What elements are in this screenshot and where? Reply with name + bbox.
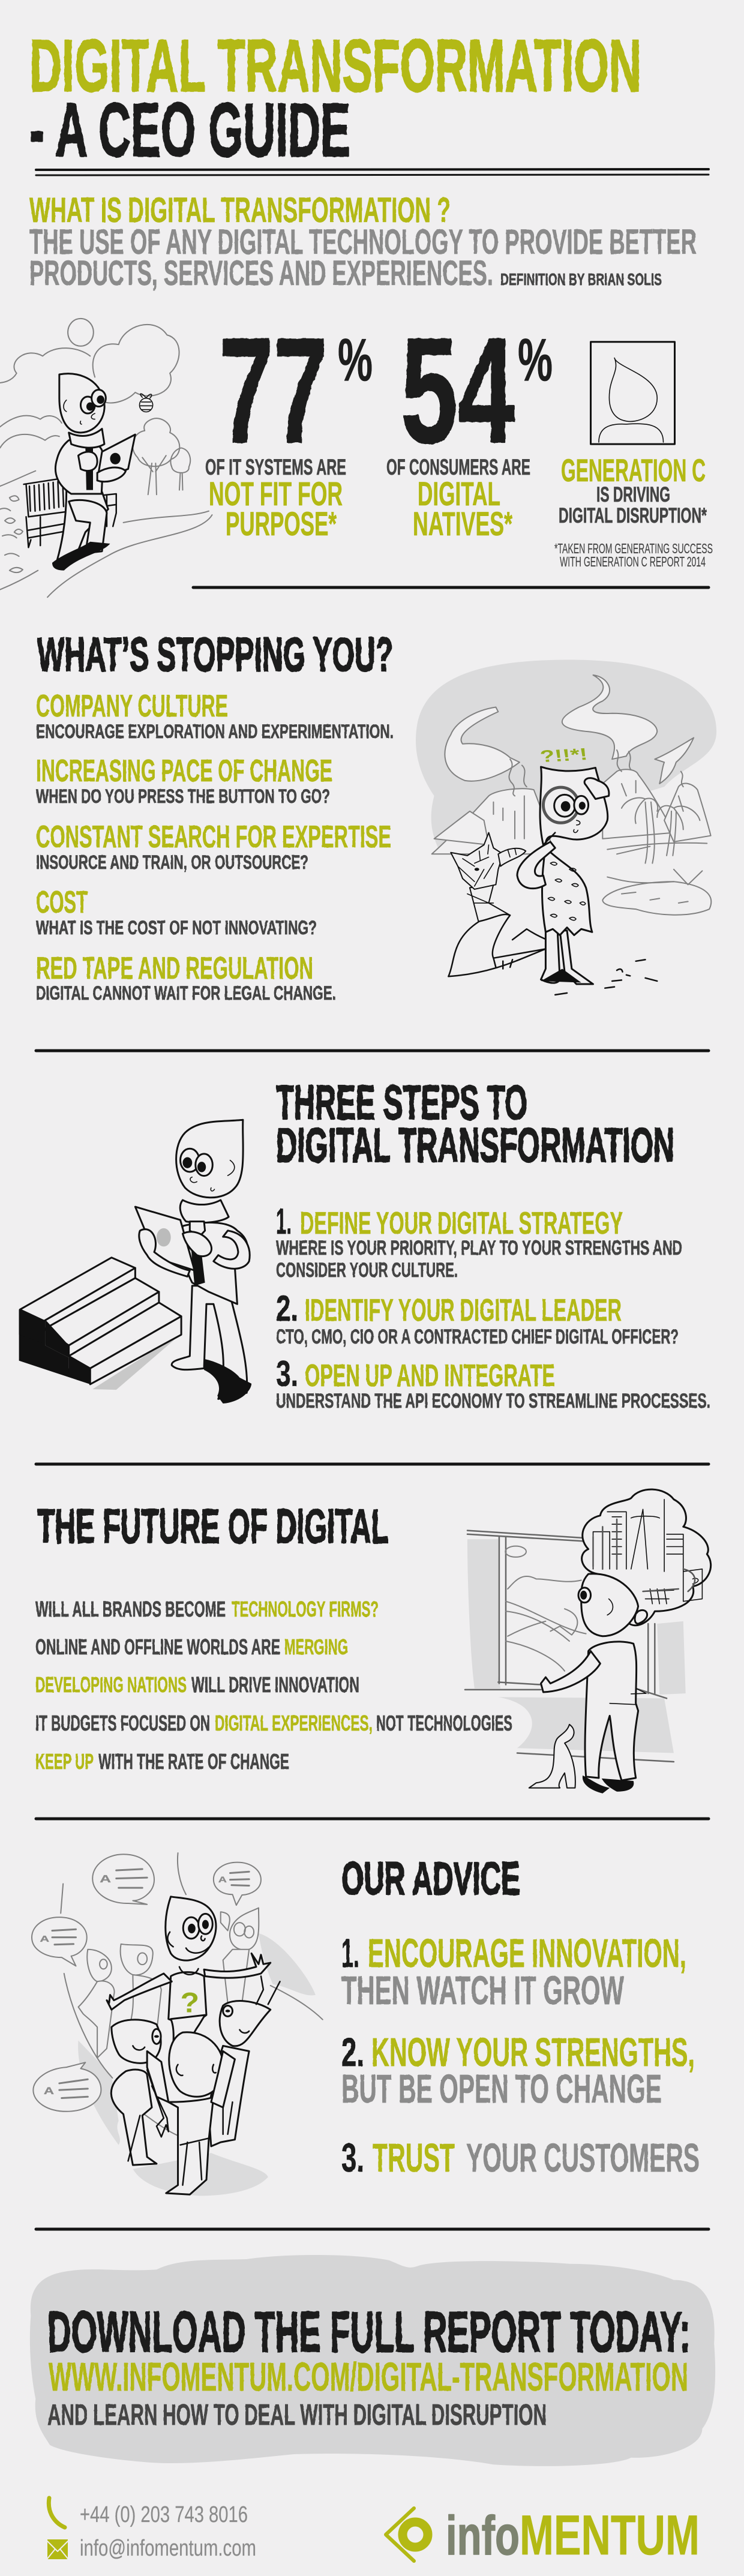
phone number: +44 (0) 203 743 8016 — [80, 2502, 248, 2527]
icon: portrait frame — [591, 342, 675, 444]
illustration: team lifting character with speech bubbles — [32, 1853, 323, 2196]
list: barriers: RED TAPE AND REGULATION — [36, 951, 313, 986]
stat: generation C with portrait icon — [559, 342, 707, 527]
stat: generation C with portrait icon: IS DRIVING — [596, 483, 670, 506]
email address: info@infomentum.com — [80, 2536, 256, 2561]
heading: our advice: OUR ADVICE — [341, 1853, 520, 1905]
list: barriers: WHEN DO YOU PRESS THE BUTTON TO GO? — [36, 785, 330, 807]
stat: 54%: % — [518, 326, 553, 394]
trend 5: KEEP UP — [35, 1749, 94, 1774]
supporting figures — [111, 1976, 280, 2194]
stat: 54%: NATIVES* — [413, 505, 512, 542]
list: barriers: WHAT IS THE COST OF NOT INNOVATING? — [36, 917, 317, 938]
list: barriers: ENCOURAGE EXPLORATION AND EXPERIMENTATION. — [36, 721, 394, 742]
illustration: character at window dreaming of future city — [465, 1489, 711, 1794]
stat: 54%: 54 — [401, 307, 515, 474]
advice 2 — [341, 2030, 695, 2112]
illustration: caveman with magnifying glass and volcanoes: ?!!*! — [539, 745, 589, 766]
list: barriers: COMPANY CULTURE — [36, 689, 228, 724]
advice 2: 2. — [341, 2030, 364, 2075]
trend 5: WITH THE RATE OF CHANGE — [98, 1749, 289, 1774]
illustration: character on stairs with tablet — [19, 1120, 251, 1404]
panel: download call to action — [30, 2255, 715, 2466]
advice 3 — [341, 2136, 700, 2181]
list: barriers: INCREASING PACE OF CHANGE — [36, 754, 332, 788]
step 1: 1. — [276, 1201, 292, 1241]
list: barriers: DIGITAL CANNOT WAIT FOR LEGAL CHANGE. — [36, 982, 336, 1004]
stat: 54%: DIGITAL — [418, 475, 500, 512]
logo: infoMENTUM: info — [446, 2505, 520, 2566]
step 1 — [276, 1201, 682, 1282]
speech bubbles — [32, 1854, 261, 2112]
step 2: 2. — [276, 1288, 298, 1329]
steps list — [276, 1201, 710, 1413]
step 3: OPEN UP AND INTEGRATE — [305, 1359, 555, 1393]
trend 3: DEVELOPING NATIONS — [35, 1672, 187, 1697]
logo: infoMENTUM — [386, 2503, 700, 2566]
trend 5 — [35, 1749, 289, 1774]
trend 4: DIGITAL EXPERIENCES, — [215, 1711, 373, 1735]
step 3 — [276, 1354, 710, 1413]
stat: 77%: PURPOSE* — [226, 505, 337, 542]
advice 3: 3. — [341, 2136, 364, 2181]
step 2 — [276, 1288, 679, 1348]
title: - A CEO GUIDE — [29, 88, 350, 172]
speech bubbles: A — [44, 2085, 54, 2097]
stat: 54% — [386, 307, 553, 542]
stat: 54%: OF CONSUMERS ARE — [386, 455, 530, 479]
list: barriers: CONSTANT SEARCH FOR EXPERTISE — [36, 820, 391, 854]
trend 4: IT BUDGETS FOCUSED ON — [35, 1711, 210, 1735]
speech bubbles: A — [218, 1876, 227, 1885]
heading: three steps — [276, 1076, 674, 1172]
heading: the future of digital: THE FUTURE OF DIGITAL — [37, 1500, 389, 1554]
trend 4: NOT TECHNOLOGIES — [376, 1711, 512, 1735]
trend 2: ONLINE AND OFFLINE WORLDS ARE — [35, 1635, 280, 1659]
trend 1: WILL ALL BRANDS BECOME — [35, 1597, 226, 1621]
trend 1: TECHNOLOGY FIRMS? — [232, 1597, 379, 1621]
speech bubbles: A — [40, 1933, 49, 1944]
heading: three steps: THREE STEPS TO — [276, 1076, 527, 1130]
step 3: 3. — [276, 1354, 298, 1394]
list: barriers: INSOURCE AND TRAIN, OR OUTSOURCE? — [36, 851, 308, 873]
heading: what's stopping you: WHAT’S STOPPING YOU? — [37, 628, 393, 681]
cloud background — [30, 2255, 715, 2466]
stat: 77%: % — [338, 326, 373, 394]
icon: phone — [49, 2498, 65, 2527]
illustration: caveman with magnifying glass and volcanoes — [416, 659, 716, 995]
icon: envelope — [47, 2539, 68, 2559]
step 1: CONSIDER YOUR CULTURE. — [276, 1259, 458, 1282]
illustration: character on park bench with tablet — [0, 319, 212, 597]
list: barriers: COST — [36, 885, 88, 920]
stat: 77%: OF IT SYSTEMS ARE — [205, 455, 346, 479]
list: future trends — [35, 1597, 512, 1774]
trend 3: WILL DRIVE INNOVATION — [191, 1672, 359, 1697]
stat: 77%: NOT FIT FOR — [209, 475, 343, 512]
footnote — [554, 541, 713, 569]
definition text block: WHAT IS DIGITAL TRANSFORMATION ? — [29, 191, 451, 230]
definition text block: DEFINITION BY BRIAN SOLIS — [500, 270, 662, 289]
definition text block — [29, 191, 697, 293]
stat: 77% — [205, 307, 373, 542]
list: advice — [341, 1931, 700, 2181]
advice 3: TRUST — [373, 2136, 455, 2181]
speech bubbles: A — [100, 1873, 111, 1885]
background figures — [78, 1908, 259, 2058]
title — [29, 25, 641, 172]
trend 2: MERGING — [284, 1635, 348, 1659]
advice 1: 1. — [341, 1931, 359, 1976]
main raised figure — [107, 1897, 271, 2067]
advice 1 — [341, 1931, 686, 2013]
trend 4 — [35, 1711, 512, 1735]
main raised figure: ? — [181, 1987, 199, 2019]
list: barriers — [36, 689, 394, 1004]
stat: 77%: 77 — [219, 307, 328, 474]
